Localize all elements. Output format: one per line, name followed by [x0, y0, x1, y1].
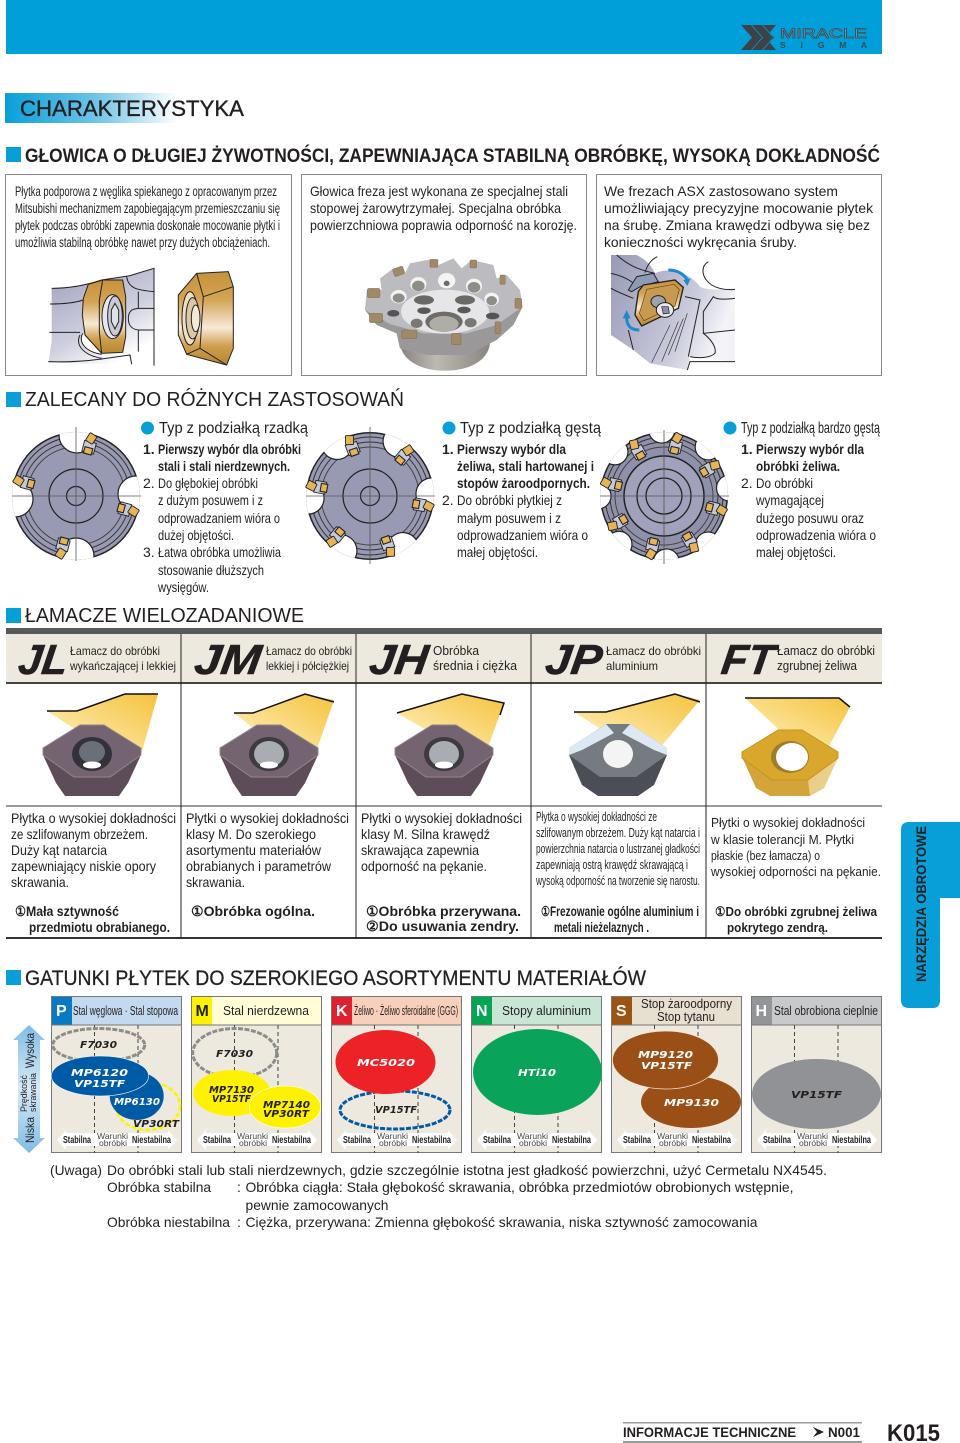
icon: JM insert: [220, 694, 334, 796]
text block: support plate: Płytka podporowa z węglika spiekanego z opracowanym przez: [15, 184, 277, 199]
conditions arrow M: Niestabilna: [272, 1135, 311, 1146]
breaker JP: Łamacz do obróbki: [606, 644, 701, 658]
logo: Miracle Sigma: [741, 25, 867, 50]
icon: JH insert: [395, 694, 504, 796]
side tab: rotating tools: [901, 822, 960, 1008]
text block: extra fine pitch: obróbki żeliwa.: [756, 458, 840, 474]
text block: fine pitch: 2.: [442, 492, 454, 508]
text block: support plate: umożliwia stabilną obróbkę nawet przy dużych obciążeniach.: [15, 235, 270, 250]
breaker FT: Łamacz do obróbki: [777, 644, 875, 658]
conditions arrow K: Warunki: [377, 1131, 408, 1141]
conditions arrow N: Niestabilna: [552, 1135, 591, 1146]
title band: CHARAKTERYSTYKA: CHARAKTERYSTYKA: [20, 96, 244, 121]
panel: grade P: P: [56, 1003, 67, 1020]
text block: fine pitch: żeliwa, stali hartowanej i: [457, 458, 594, 474]
text: JL description: Płytka o wysokiej dokładności: [11, 810, 176, 826]
text: JH description: ①Obróbka przerywana.: [366, 903, 521, 919]
logo: Miracle Sigma: MIRACLE: [780, 25, 867, 41]
notes: Ciężka, przerywana: Zmienna głębokość skrawania, niska sztywność zamocowania: [246, 1214, 758, 1230]
conditions arrow S: Stabilna: [623, 1135, 651, 1146]
grade ellipses M: F7030: [216, 1049, 253, 1060]
grade ellipses P: F7030: [80, 1040, 117, 1051]
text block: coarse pitch: Pierwszy wybór dla obróbki: [158, 441, 301, 457]
text block: extra fine pitch: małej objętości.: [756, 544, 836, 560]
text block: coarse pitch: stali i stali nierdzewnych.: [158, 458, 290, 474]
breaker FT: [719, 636, 875, 683]
axis: cutting speed: [13, 1025, 45, 1153]
conditions arrow M: obróbki: [239, 1138, 267, 1148]
panel: grade M: M: [196, 1003, 209, 1020]
text: FT description: w klasie tolerancji M. Płytki: [710, 832, 854, 847]
breaker JM: [192, 636, 352, 683]
text block: extra fine pitch: Typ z podziałką bardzo gęstą: [741, 420, 880, 437]
text: JH description: Płytki o wysokiej dokładności: [361, 810, 522, 826]
text block: fine pitch: Typ z podziałką gęstą: [460, 420, 601, 437]
conditions arrow K: Niestabilna: [412, 1135, 451, 1146]
panel: grade M: Stal nierdzewna: [223, 1003, 310, 1018]
conditions arrow H: Niestabilna: [832, 1135, 871, 1146]
footer: technical information: [623, 1422, 862, 1443]
conditions arrow S: obróbki: [659, 1138, 687, 1148]
heading: insert grades: GATUNKI PŁYTEK DO SZEROKIEGO ASORTYMENTU MATERIAŁÓW: [25, 967, 646, 990]
notes: Obróbka niestabilna: [107, 1214, 230, 1230]
grade ellipses M: [193, 1028, 321, 1128]
grade ellipses S: [612, 1031, 741, 1128]
text block: cutter body: Głowica freza jest wykonana ze specjalnej stali: [310, 183, 568, 199]
text block: clamping: [604, 183, 874, 250]
text block: extra fine pitch: odprowadzenia wióra o: [756, 527, 876, 543]
text block: clamping: konieczności wykręcania śruby.: [604, 234, 797, 250]
text: FT description: pokrytego zendrą.: [727, 920, 828, 935]
text block: coarse pitch: 3.: [143, 544, 155, 560]
text: JP description: zapewniają ostrą krawędź skrawającą i: [536, 857, 688, 872]
text: FT description: ①Do obróbki zgrubnej żeliwa: [715, 904, 878, 919]
conditions arrow N: Warunki: [517, 1131, 548, 1141]
panel: grade K: [331, 996, 462, 1153]
text: JP description: ①Frezowanie ogólne aluminium i: [541, 904, 699, 919]
notes: Obróbka stabilna: [107, 1179, 211, 1195]
text block: support plate: [15, 184, 280, 250]
breaker JH: Obróbka: [433, 644, 479, 658]
text block: clamping: umożliwiający precyzyjne mocowanie płytek: [604, 200, 874, 216]
grade ellipses P: [51, 1028, 180, 1130]
conditions arrow N: Stabilna: [483, 1135, 511, 1146]
conditions arrow K: obróbki: [379, 1138, 407, 1148]
conditions arrow H: Stabilna: [763, 1135, 791, 1146]
grade ellipses S: MP9130: [664, 1098, 719, 1109]
conditions arrow P: Niestabilna: [132, 1135, 171, 1146]
text: FT description: wysokiej odporności na pękanie.: [710, 864, 881, 879]
text: JM description: klasy M. Do szerokiego: [186, 826, 316, 842]
side tab: rotating tools: NARZĘDZIA OBROTOWE: [913, 826, 929, 982]
panel: grade N: Stopy aluminium: [502, 1003, 591, 1018]
text: JL description: ze szlifowanym obrzeżem.: [11, 826, 148, 842]
panel: grade H: H: [756, 1003, 767, 1020]
diagram: coarse pitch cutter: [12, 427, 141, 561]
footer: technical information: INFORMACJE TECHNICZNE: [623, 1424, 796, 1440]
notes: :: [237, 1214, 241, 1230]
text block: support plate: płytek podczas obróbki zapewnia doskonałe mocowanie płytki i: [15, 218, 280, 233]
breaker JH: średnia i ciężka: [433, 659, 517, 673]
text block: support plate: Mitsubishi mechanizmem zapobiegającym przemieszczaniu się: [15, 201, 280, 216]
text block: coarse pitch: stosowanie dłuższych: [158, 562, 264, 578]
conditions arrow N: obróbki: [519, 1138, 547, 1148]
text: JH description: odporność na pękanie.: [361, 858, 487, 874]
text: JP description: Płytka o wysokiej dokładności ze: [536, 809, 657, 824]
axis: cutting speed: Wysoka: [23, 1033, 37, 1068]
breaker JP: [543, 636, 701, 683]
notes: Obróbka ciągła: Stała głębokość skrawania, obróbka przedmiotów obrobionych wstępnie,: [246, 1179, 794, 1195]
grade ellipse N: [473, 1029, 602, 1115]
illustration: seat and support plate: [48, 268, 233, 366]
text block: fine pitch: Do obróbki płytkiej z: [457, 492, 562, 508]
text block: fine pitch: stopów żaroodpornych.: [457, 475, 590, 491]
text block: coarse pitch: 1.: [143, 441, 155, 457]
text: JL description: przedmiotu obrabianego.: [29, 919, 170, 935]
conditions arrow H: Warunki: [797, 1131, 828, 1141]
text: JP description: powierzchnia natarcia o lustrzanej gładkości: [536, 841, 700, 856]
text: JM description: skrawania.: [186, 874, 245, 890]
panel: grade H: [751, 996, 882, 1153]
conditions arrow P: Warunki: [97, 1131, 128, 1141]
text: JP description: metali nieżelaznych .: [554, 920, 649, 935]
axis: cutting speed: skrawania: [28, 1072, 39, 1112]
panel: grade P: [51, 996, 182, 1153]
grade ellipse H: VP15TF: [791, 1090, 842, 1101]
text block: fine pitch: Pierwszy wybór dla: [457, 441, 566, 457]
breaker JM: JM: [192, 636, 265, 683]
text block: extra fine pitch: dużego posuwu oraz: [756, 510, 864, 526]
icon: JL insert: [43, 694, 158, 796]
breaker FT: zgrubnej żeliwa: [777, 659, 857, 673]
panel: grade S: Stop żaroodporny: [641, 997, 733, 1011]
text: JL description: zapewniający niskie opory: [11, 858, 156, 874]
text: JH description: klasy M. Silna krawędź: [361, 826, 490, 842]
conditions arrow H: [757, 1130, 877, 1150]
text block: extra fine pitch: Do obróbki: [756, 475, 813, 491]
conditions arrow S: Niestabilna: [692, 1135, 731, 1146]
text: FT description: [710, 815, 881, 935]
breaker JM: lekkiej i półciężkiej: [266, 659, 349, 673]
text: JP description: [535, 809, 700, 935]
photo: face mill cutter: [365, 258, 523, 371]
conditions arrow M: Stabilna: [203, 1135, 231, 1146]
panel: grade K: K: [336, 1003, 348, 1020]
text block: extra fine pitch: Pierwszy wybór dla: [756, 441, 864, 457]
text block: coarse pitch: Typ z podziałką rzadką: [159, 420, 308, 437]
breaker JL: wykańczającej i lekkiej: [69, 659, 176, 673]
panel: grade N: N: [476, 1003, 488, 1020]
text: JH description: skrawająca zapewnia: [361, 842, 479, 858]
panel: grade H: Stal obrobiona cieplnie: [774, 1003, 878, 1018]
grade ellipses M: MP7140: [263, 1100, 310, 1111]
panel: grade S: Stop tytanu: [657, 1010, 715, 1024]
text block: coarse pitch: z dużym posuwem i z: [158, 492, 263, 508]
conditions arrow M: Warunki: [237, 1131, 268, 1141]
grade ellipses M: MP7130: [209, 1085, 254, 1096]
diagram: fine pitch cutter: [305, 427, 435, 564]
conditions arrow K: [337, 1130, 457, 1150]
breaker JP: aluminium: [606, 659, 658, 673]
notes: [50, 1162, 827, 1230]
conditions arrow P: obróbki: [99, 1138, 127, 1148]
grade ellipses K: [336, 1030, 450, 1129]
diagram: extra fine pitch cutter: [600, 430, 729, 564]
text block: cutter body: [310, 183, 577, 233]
grade ellipse H: [752, 1059, 881, 1129]
text block: coarse pitch: [141, 420, 308, 595]
text block: extra fine pitch: 1.: [741, 441, 753, 457]
text: JL description: [11, 810, 176, 935]
panel: grade S: [611, 996, 742, 1153]
text: FT description: płaskie (bez łamacza) o: [711, 848, 820, 863]
text block: fine pitch: 1.: [442, 441, 454, 457]
text block: coarse pitch: Łatwa obróbka umożliwia: [158, 544, 281, 560]
notes: (Uwaga): [50, 1162, 102, 1178]
text block: extra fine pitch: [724, 420, 880, 560]
conditions arrow S: Warunki: [657, 1131, 688, 1141]
panel: heat resistant steel body: [302, 174, 586, 376]
notes: Do obróbki stali lub stali nierdzewnych, gdzie szczególnie istotna jest gładkość powierzchni, użyć Cermetalu NX4545.: [107, 1162, 827, 1178]
icon: JP insert: [569, 694, 700, 796]
panel: grade M: [191, 996, 322, 1153]
text: JL description: ①Mała sztywność: [15, 903, 119, 919]
notes: :: [237, 1179, 241, 1195]
panel: grade K: Żeliwo · Żeliwo sferoidalne (GGG): [354, 1004, 458, 1018]
panel: grade P: Stal węglowa · Stal stopowa: [73, 1004, 178, 1018]
logo: Miracle Sigma: S I G M A: [780, 40, 867, 50]
icon: FT insert: [742, 698, 850, 796]
breaker JM: Łamacz do obróbki: [266, 644, 352, 658]
text block: fine pitch: małej objętości.: [457, 544, 538, 560]
grade ellipses P: MP6130: [114, 1097, 160, 1108]
text: JM description: Płytki o wysokiej dokładności: [186, 810, 349, 826]
axis: cutting speed: Prędkość: [19, 1075, 30, 1112]
grade ellipses S: MP9120: [638, 1050, 693, 1061]
footer: technical information: N001: [828, 1424, 860, 1440]
text block: fine pitch: małym posuwem i z: [457, 510, 561, 526]
grade ellipses S: VP15TF: [641, 1061, 692, 1072]
text: JH description: ②Do usuwania zendry.: [366, 918, 519, 934]
text: JP description: szlifowanym obrzeżem. Duży kąt natarcia i: [536, 825, 700, 840]
table: chip breakers: [6, 628, 882, 939]
panel: carbide support plate: [6, 174, 292, 376]
text: JM description: obrabianych i parametrów: [186, 858, 332, 874]
text: JM description: [186, 810, 349, 919]
text block: extra fine pitch: 2.: [741, 475, 753, 491]
breaker JL: JL: [16, 636, 71, 683]
grade ellipses P: VP15TF: [74, 1079, 125, 1090]
text: JM description: ①Obróbka ogólna.: [191, 903, 315, 919]
text: JL description: Duży kąt natarcia: [11, 842, 107, 858]
breaker JL: Łamacz do obróbki: [70, 644, 160, 658]
grade ellipse N: HTi10: [518, 1068, 556, 1079]
text block: coarse pitch: Do głębokiej obróbki: [158, 475, 258, 491]
panel: grade S: S: [616, 1003, 627, 1020]
conditions arrow N: [477, 1130, 597, 1150]
breaker JH: [367, 636, 517, 683]
conditions arrow P: Stabilna: [63, 1135, 91, 1146]
breaker JP: JP: [543, 636, 606, 683]
text block: fine pitch: [442, 420, 601, 560]
header band: [6, 0, 882, 54]
conditions arrow H: obróbki: [799, 1138, 827, 1148]
heading: long life cutter: GŁOWICA O DŁUGIEJ ŻYWOTNOŚCI, ZAPEWNIAJĄCA STABILNĄ OBRÓBKĘ, WYSOKĄ DOKŁADNOŚĆ: [25, 143, 880, 167]
breaker JL: [16, 636, 176, 683]
text block: cutter body: powierzchniowa poprawia odporność na korozję.: [310, 217, 577, 233]
conditions arrow K: Stabilna: [343, 1135, 371, 1146]
illustration: screw clamped insert: [611, 255, 735, 370]
text block: cutter body: stopowej żarowytrzymałej. Specjalna obróbka: [310, 200, 561, 216]
conditions arrow P: [57, 1130, 177, 1150]
breaker JH: JH: [367, 636, 433, 683]
grade ellipses M: VP30RT: [263, 1109, 310, 1120]
panel: grade N: [471, 996, 602, 1153]
text block: extra fine pitch: wymagającej: [755, 492, 824, 508]
text: JH description: [361, 810, 522, 934]
text: JM description: asortymentu materiałów: [186, 842, 322, 858]
heading: multi-purpose breakers: ŁAMACZE WIELOZADANIOWE: [25, 604, 304, 627]
text block: coarse pitch: odprowadzaniem wióra o: [158, 510, 280, 526]
text block: coarse pitch: dużej objętości.: [158, 527, 234, 543]
text block: clamping: na śrubę. Zmiana krawędzi odbywa się bez: [604, 217, 870, 233]
grade ellipses P: VP30RT: [133, 1119, 180, 1130]
text block: clamping: We frezach ASX zastosowano system: [604, 183, 838, 199]
conditions arrow S: [617, 1130, 737, 1150]
notes: pewnie zamocowanych: [246, 1197, 388, 1213]
conditions arrow M: [197, 1130, 317, 1150]
text: FT description: Płytki o wysokiej dokładności: [711, 815, 865, 830]
panel: insert clamping system: [596, 174, 882, 376]
heading: recommended applications: ZALECANY DO RÓŻNYCH ZASTOSOWAŃ: [25, 388, 404, 411]
grade ellipses M: VP15TF: [212, 1094, 251, 1105]
breaker FT: FT: [719, 636, 781, 683]
text block: coarse pitch: 2.: [143, 475, 155, 491]
text block: coarse pitch: wysięgów.: [157, 579, 209, 595]
grade ellipses K: VP15TF: [375, 1105, 417, 1116]
text: JL description: skrawania.: [11, 874, 69, 890]
axis: cutting speed: Niska: [23, 1117, 37, 1143]
text: JP description: wysoką odporność na tworzenie się narostu.: [535, 873, 700, 888]
grade ellipses K: MC5020: [357, 1058, 415, 1069]
grade ellipses P: MP6120: [71, 1068, 128, 1079]
text block: fine pitch: odprowadzaniem wióra o: [457, 527, 588, 543]
